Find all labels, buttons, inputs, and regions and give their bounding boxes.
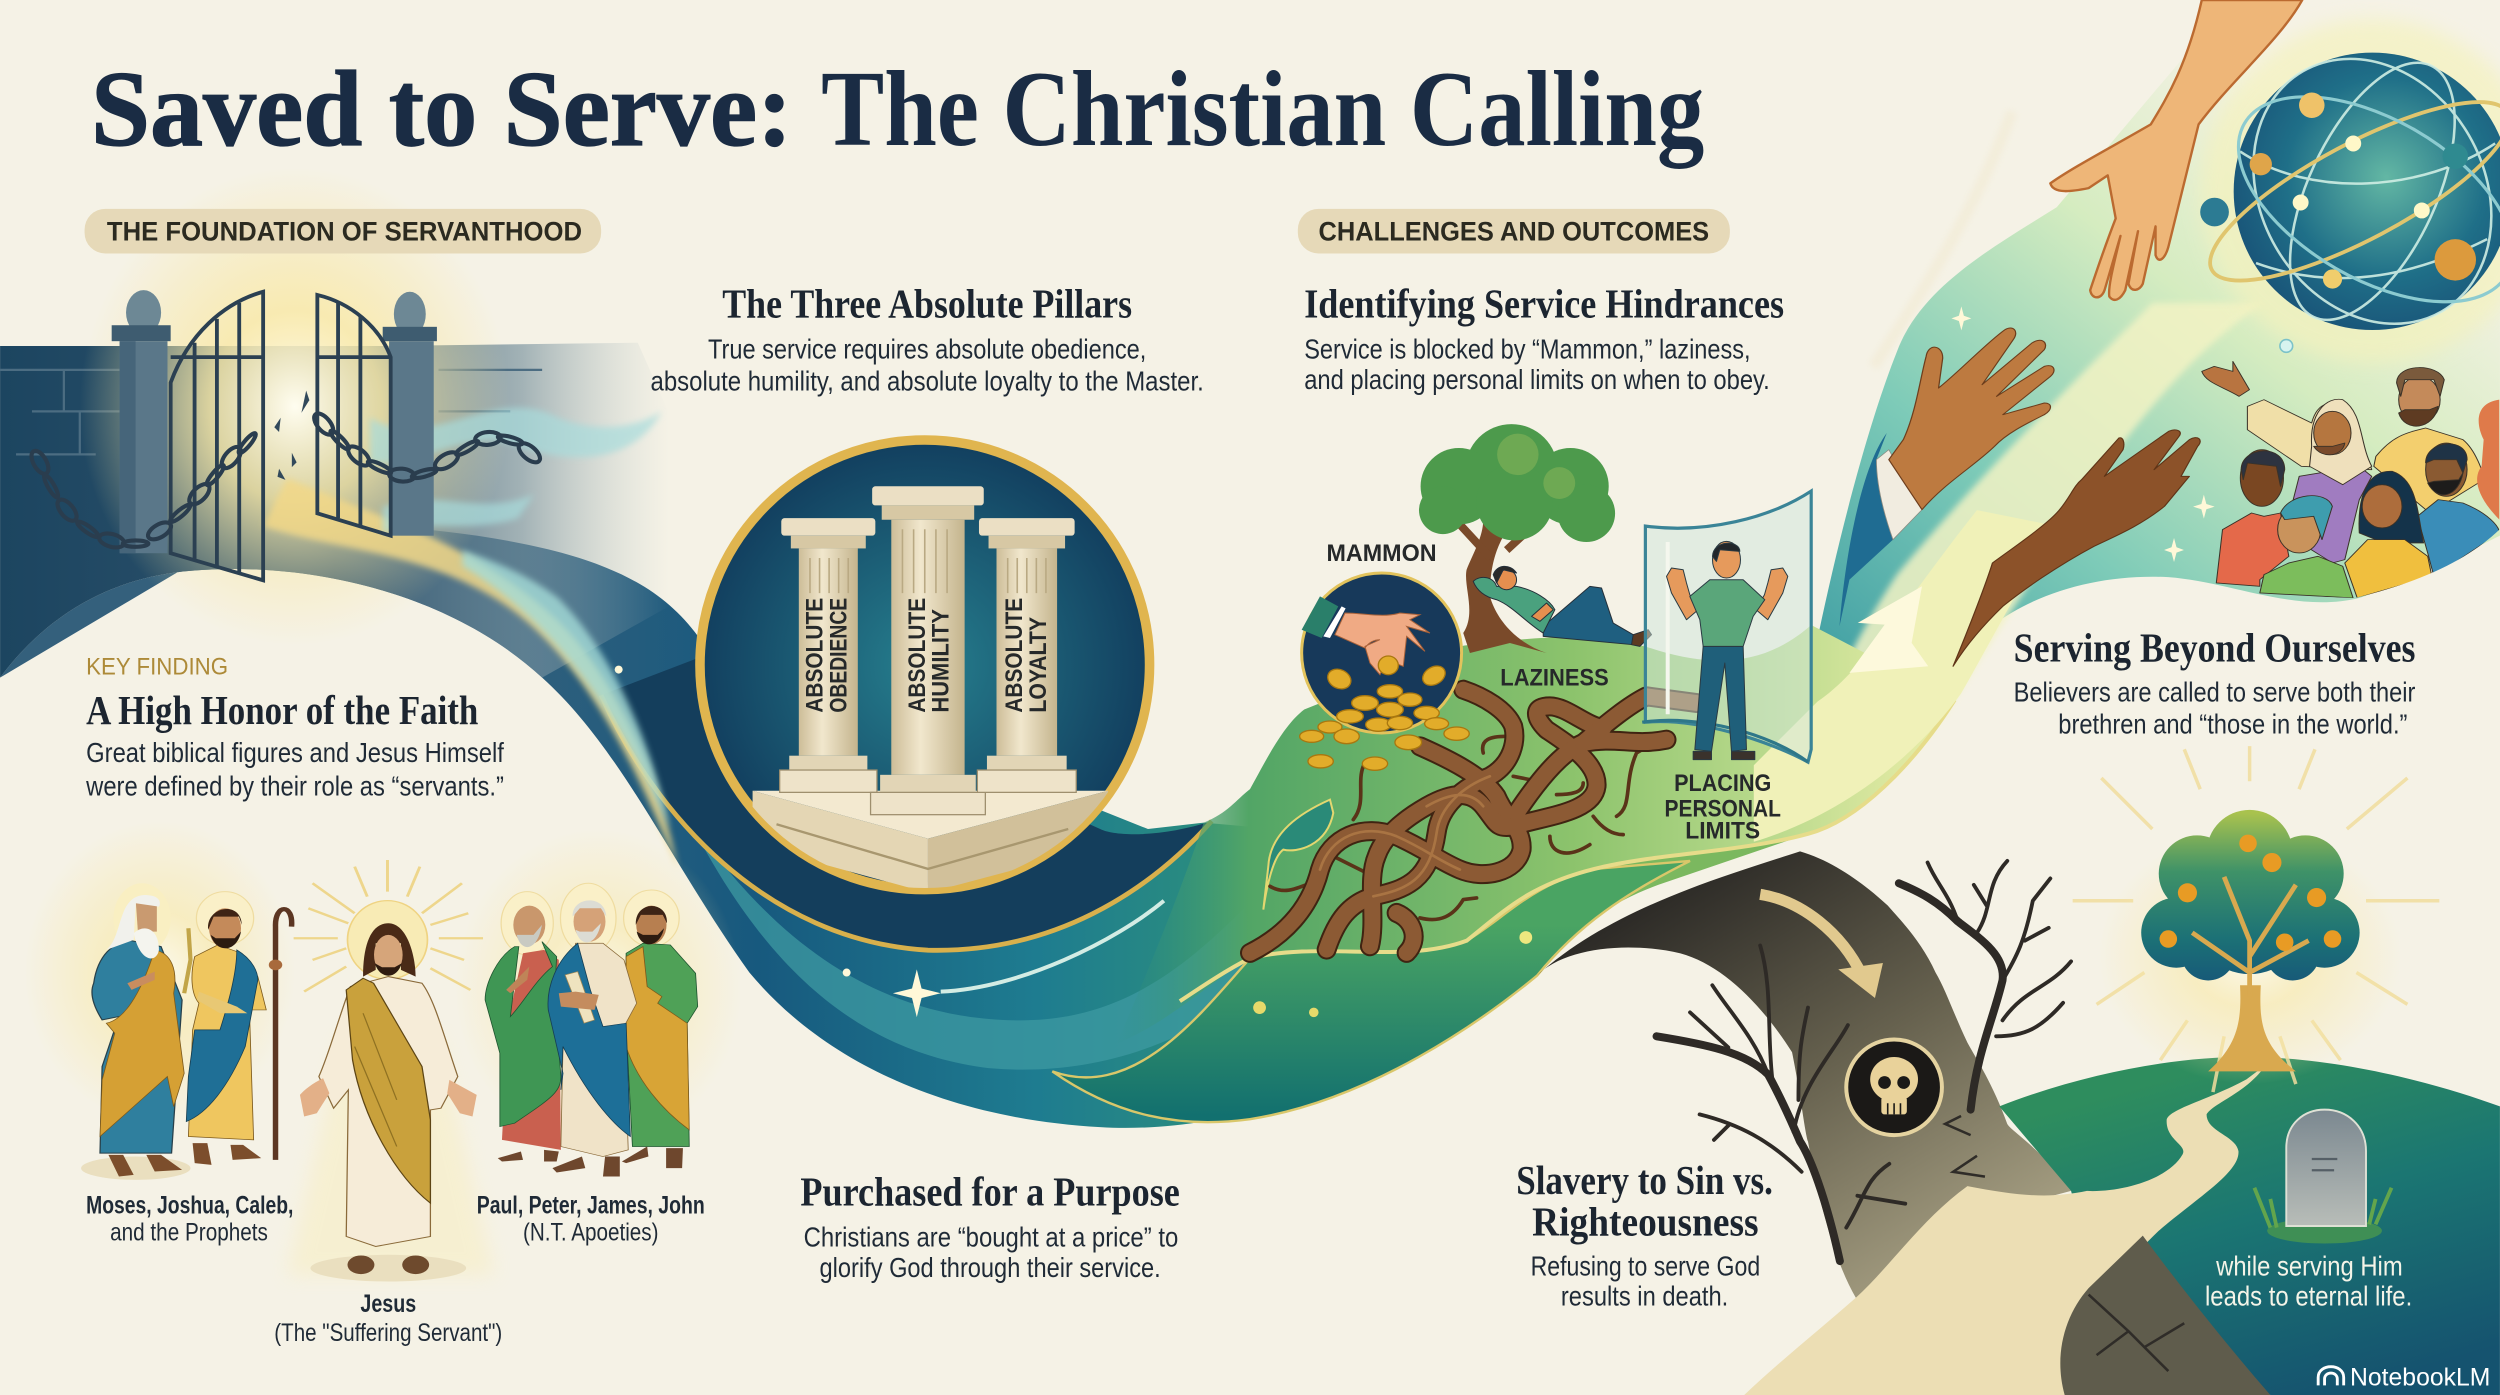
caption: old testament servants: Moses, Joshua, Caleb,	[86, 1192, 293, 1219]
text block: key finding: A High Honor of the Faith	[86, 687, 478, 733]
ascending arrow	[1849, 586, 1928, 673]
green hill	[1999, 1057, 2500, 1395]
text block: key finding	[85, 653, 504, 802]
dead tree right	[1899, 861, 2071, 1110]
text block: slavery: Slavery to Sin vs.	[1516, 1157, 1773, 1203]
text block: slavery	[1516, 1157, 1773, 1312]
figure: Moses	[81, 883, 191, 1180]
white cuff	[1876, 450, 1922, 540]
text block: three pillars	[651, 280, 1204, 397]
wall bricks	[0, 370, 542, 454]
title: Saved to Serve:	[91, 49, 792, 169]
text block: slavery: Refusing to serve God	[1531, 1250, 1760, 1281]
panel: sky and hands backdrop	[1802, 0, 2500, 829]
text block: eternal life: leads to eternal life.	[2205, 1281, 2412, 1312]
path arrow	[1760, 894, 1883, 998]
section pill: foundation	[85, 209, 601, 253]
hill cracks	[2089, 1295, 2184, 1371]
title	[91, 49, 1704, 169]
mammon coin circle	[1300, 573, 1469, 770]
teal leaf swirl	[1263, 800, 1333, 910]
pillar: absolute loyalty	[977, 518, 1076, 792]
label: placing personal limits: PERSONAL	[1665, 795, 1781, 822]
panel: biblical figures	[24, 821, 741, 1281]
text block: serving beyond: Serving Beyond Ourselves	[2014, 625, 2415, 671]
caption: apostles: (N.T. Apoeties)	[523, 1219, 659, 1246]
text block: serving beyond: Believers are called to serve both their	[2014, 676, 2415, 707]
caption: jesus: (The "Suffering Servant")	[274, 1320, 502, 1347]
dead tree left	[1657, 945, 1905, 1261]
text block: hindrances: Service is blocked by “Mammon,” laziness,	[1304, 334, 1751, 365]
caption: apostles	[477, 1192, 705, 1246]
text block: key finding: Great biblical figures and Jesus Himself	[86, 737, 504, 768]
caption: jesus	[274, 1291, 502, 1347]
text block: three pillars: absolute humility, and absolute loyalty to the Master.	[651, 366, 1204, 397]
section pill: challenges	[1298, 209, 1730, 253]
wall	[0, 343, 670, 678]
man with raised palms	[1667, 541, 1788, 760]
dark man left	[2216, 450, 2289, 586]
globe	[2189, 15, 2500, 367]
text block: purchased	[800, 1168, 1180, 1283]
right chain	[311, 410, 543, 483]
ground cracks	[1945, 1116, 1985, 1177]
text block: purchased: glorify God through their service.	[820, 1252, 1161, 1283]
ribbon: yellow band	[1754, 510, 2057, 842]
panel: three pillars circle	[700, 440, 1150, 893]
section pill: foundation: THE FOUNDATION OF SERVANTHOOD	[107, 216, 582, 247]
text block: slavery: results in death.	[1561, 1281, 1728, 1312]
glow: right group	[454, 829, 741, 1148]
figure: Paul	[485, 892, 561, 1162]
platform	[753, 791, 1108, 893]
label: laziness: LAZINESS	[1500, 665, 1609, 692]
ribbon: sparkles	[615, 666, 1532, 1017]
group sparkles	[1951, 306, 2215, 562]
woman	[2345, 471, 2432, 598]
caption: apostles: Paul, Peter, James, John	[477, 1192, 705, 1219]
cream path	[1744, 1065, 2270, 1395]
jesus rays	[294, 860, 483, 992]
figure: Peter	[548, 883, 637, 1177]
text block: purchased: Christians are “bought at a price” to	[804, 1222, 1178, 1253]
ribbon: curved highlight	[941, 901, 1164, 992]
glow: left group	[24, 821, 295, 1124]
title: The Christian Calling	[821, 49, 1704, 169]
skull badge	[1846, 1039, 1942, 1135]
gravestone	[2254, 1110, 2392, 1244]
glass barrier with man	[1642, 491, 1811, 762]
caption: old testament servants: and the Prophets	[110, 1219, 268, 1246]
text block: three pillars: True service requires absolute obedience,	[708, 334, 1146, 365]
tree of life	[2073, 746, 2439, 1092]
panel: gate and broken chains	[0, 167, 678, 869]
text block: hindrances: Identifying Service Hindrances	[1304, 280, 1784, 326]
text block: serving beyond: brethren and “those in the world.”	[2058, 708, 2407, 739]
light stream	[263, 478, 678, 869]
panel: hindrances scene	[1250, 424, 1928, 953]
ribbon: deep green wedge	[1052, 861, 1690, 1122]
section pill: challenges: CHALLENGES AND OUTCOMES	[1319, 216, 1709, 247]
figure: James	[622, 890, 698, 1168]
caption: old testament servants	[86, 1192, 293, 1246]
panel: the two paths	[1537, 746, 2500, 1395]
text block: key finding: KEY FINDING	[86, 653, 228, 680]
ribbon: teal mid band	[686, 813, 1276, 1070]
pillar: absolute loyalty: ABSOLUTE	[1001, 598, 1028, 713]
NotebookLM mark: NotebookLM	[2350, 1364, 2490, 1391]
label: placing personal limits: LIMITS	[1685, 818, 1760, 845]
label: placing personal limits	[1665, 770, 1781, 845]
text block: slavery: Righteousness	[1532, 1199, 1759, 1245]
glow behind gate	[80, 167, 510, 646]
aqua stream	[462, 550, 670, 829]
child with turban	[2260, 496, 2353, 598]
helper hand	[1889, 328, 2054, 510]
text block: serving beyond	[2014, 625, 2415, 739]
text block: key finding: were defined by their role as “servants.”	[85, 771, 504, 802]
pillar: absolute humility: HUMILITY	[928, 609, 955, 713]
right gate leaf	[317, 295, 391, 536]
bearded man	[2374, 368, 2484, 513]
tangled roots	[1250, 690, 1696, 953]
label: placing personal limits: PLACING	[1674, 770, 1771, 797]
second reaching arm	[1953, 430, 2200, 666]
text block: hindrances: and placing personal limits on when to obey.	[1304, 364, 1770, 395]
text block: eternal life: while serving Him	[2215, 1250, 2403, 1281]
ribbon: pale green hill band	[1116, 625, 1955, 1044]
right post	[383, 292, 437, 536]
figure: Jesus	[300, 901, 477, 1281]
caption: jesus: Jesus	[360, 1291, 416, 1318]
pillar: absolute humility: ABSOLUTE	[904, 598, 931, 713]
text block: eternal life	[2205, 1250, 2412, 1312]
tree trunk	[1463, 520, 1547, 653]
figure: Joshua	[186, 892, 292, 1165]
blue sleeve	[1840, 433, 1893, 626]
left chain	[28, 431, 258, 550]
label: mammon: MAMMON	[1327, 540, 1437, 567]
text block: three pillars: The Three Absolute Pillars	[722, 280, 1132, 326]
hooded person with raised hand	[2202, 361, 2372, 563]
chain shards	[274, 391, 309, 480]
ribbon: navy crescent under pillars	[601, 654, 1212, 950]
tree rays	[2073, 746, 2439, 1092]
dark path of sin	[1537, 851, 2071, 1298]
tree canopy	[1419, 424, 1615, 558]
text block: hindrances	[1304, 280, 1784, 395]
glow: jesus	[287, 1036, 494, 1275]
pillar: absolute obedience: ABSOLUTE	[802, 598, 829, 713]
sleeping man	[1473, 566, 1652, 646]
dark crack patch	[2060, 1236, 2270, 1395]
panel: reaching hands, globe and people	[1840, 0, 2500, 666]
water waves	[370, 408, 662, 534]
left post	[112, 290, 171, 553]
pillar: absolute humility	[871, 486, 985, 815]
left gate leaf	[171, 292, 263, 580]
dark man right	[2417, 443, 2499, 576]
pillar: absolute obedience	[780, 518, 877, 792]
ribbon: gold edge line	[1180, 700, 1955, 1001]
panel: flowing ribbon	[0, 510, 2057, 1128]
orange person	[2477, 400, 2499, 520]
pillar: absolute obedience: OBEDIENCE	[826, 598, 853, 713]
hand from above	[2050, 0, 2302, 300]
text block: purchased: Purchased for a Purpose	[800, 1168, 1180, 1214]
pillar: absolute loyalty: LOYALTY	[1025, 617, 1052, 713]
ribbon: crescent gold line	[601, 695, 1212, 950]
globe orbit glow	[2200, 19, 2500, 363]
people group	[2202, 361, 2499, 598]
